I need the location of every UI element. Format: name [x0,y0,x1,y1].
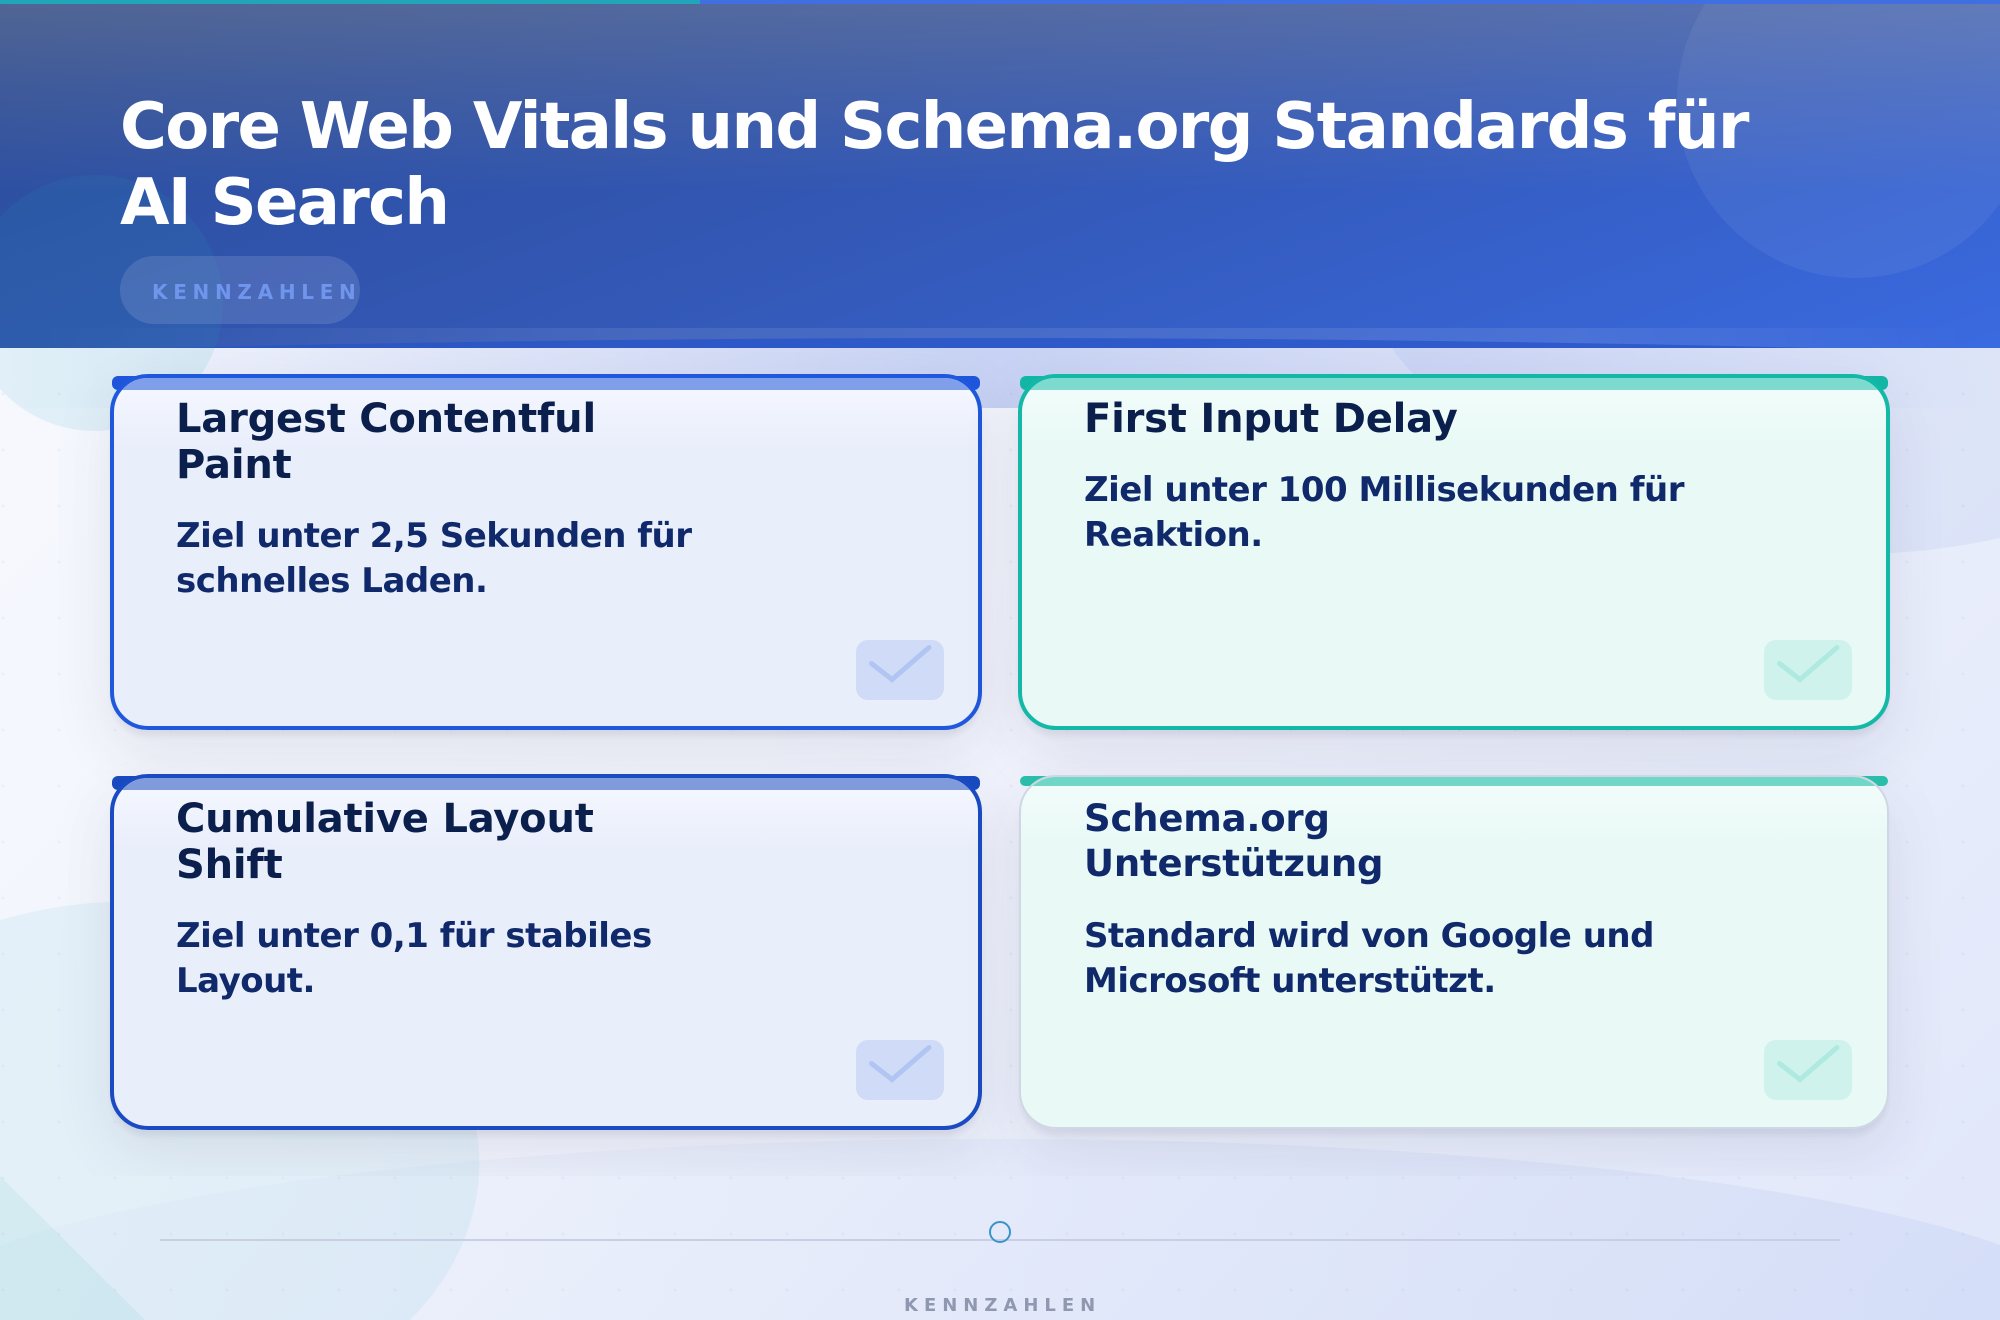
title [120,90,1750,240]
card text: schnelles Laden. [176,561,487,601]
icon: check [1764,640,1852,700]
panel: Schema.org Unterstützung [1010,775,1898,1158]
strip [1022,378,1886,390]
header pill [120,256,360,324]
card accent bar [1020,776,1888,786]
card heading [176,396,596,488]
card text: Reaktion. [1084,515,1263,555]
card text: Ziel unter 100 Millisekunden für [1084,470,1684,510]
card heading [1084,797,1383,885]
card heading: Cumulative Layout [176,796,594,842]
strip [114,778,978,790]
card text [1084,470,1684,555]
footer label: KENNZAHLEN [904,1295,1101,1316]
header wave [170,4,2000,348]
card face [1019,775,1889,1129]
progress fill [0,0,700,4]
card heading: First Input Delay [1084,396,1458,442]
card accent bar [112,376,980,390]
decorative circle top left [0,348,214,431]
footer marker circle [989,1221,1011,1243]
panel: Largest Contentful Paint [101,374,991,759]
cards area [101,374,1899,1159]
card accent bar [1020,376,1888,390]
panel: Cumulative Layout Shift [101,774,991,1159]
card heading: Largest Contentful [176,396,596,442]
card text: Layout. [176,961,315,1001]
card face [110,774,982,1130]
strip [1021,777,1887,786]
card text: Standard wird von Google und [1084,916,1654,956]
card text: Ziel unter 0,1 für stabiles [176,916,652,956]
strip [114,378,978,390]
card heading: Paint [176,442,292,488]
title: Core Web Vitals und Schema.org Standards für [120,90,1748,164]
card face [110,374,982,730]
card text [176,916,652,1001]
icon: check [856,1040,944,1100]
footer divider [160,1239,1840,1241]
card heading [176,796,594,888]
title: AI Search [120,166,448,240]
card heading: Unterstützung [1084,842,1383,885]
top progress bar [0,0,2000,4]
card accent bar [112,776,980,790]
pill label: KENNZAHLEN [152,280,362,304]
card text [1084,916,1654,1001]
icon: check [856,640,944,700]
card text: Ziel unter 2,5 Sekunden für [176,516,692,556]
card face [1018,374,1890,730]
icon: check [1764,1040,1852,1100]
card heading: Schema.org [1084,797,1330,840]
header band [0,0,2000,348]
card heading: Shift [176,842,283,888]
card text: Microsoft unterstützt. [1084,961,1496,1001]
card text [176,516,692,601]
panel: First Input Delay [1009,374,1899,759]
